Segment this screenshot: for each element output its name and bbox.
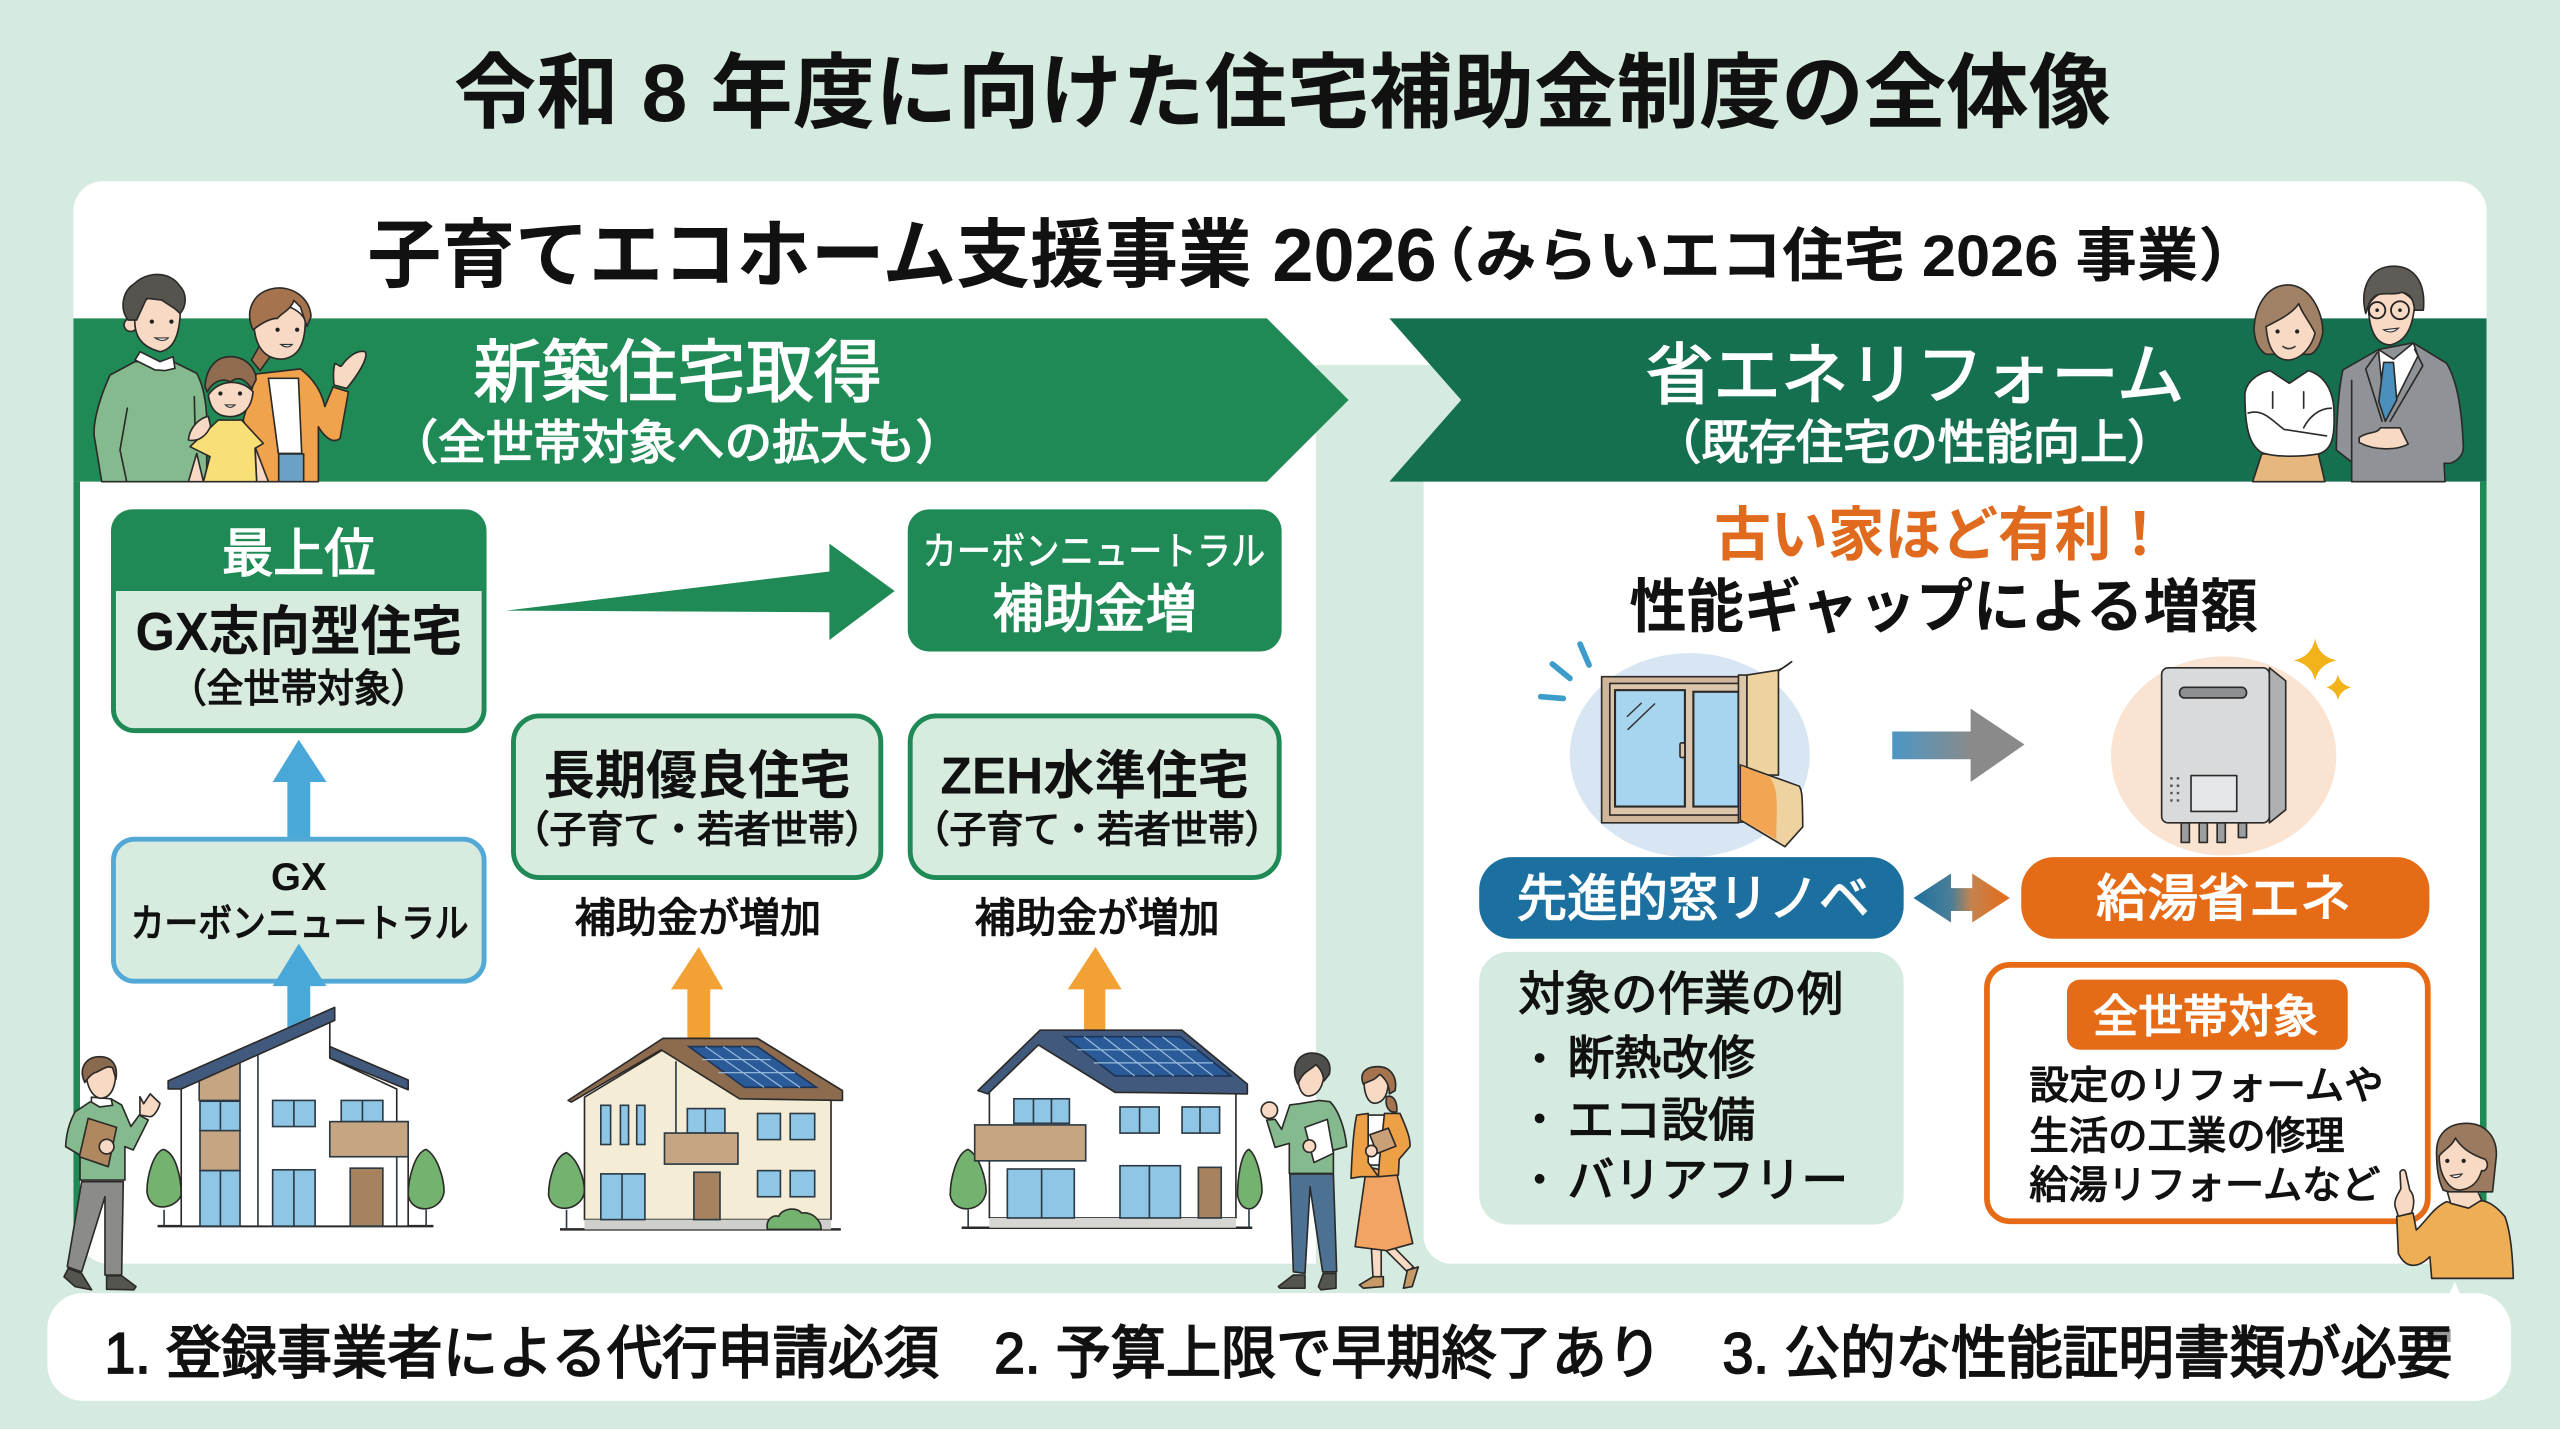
box: carbon neutral subsidy increase: 補助金増 bbox=[993, 581, 1197, 639]
header arrow: reform: 省エネリフォーム bbox=[1646, 338, 2184, 413]
box: GX carbon neutral: カーボンニュートラル bbox=[131, 903, 469, 946]
arrow: blue upper bbox=[273, 740, 327, 838]
panel: target work examples bbox=[1479, 952, 1904, 1224]
panel: reform column bbox=[1389, 266, 2487, 1264]
panel: target work examples: 断熱改修 bbox=[1567, 1032, 1755, 1085]
header arrow: reform: （既存住宅の性能向上） bbox=[1654, 417, 2175, 470]
header arrow: reform bbox=[1389, 318, 2487, 482]
arrow: orange left bbox=[671, 947, 723, 1040]
header arrow: new-build bbox=[73, 318, 1349, 482]
heading: programme name: 子育てエコホーム支援事業 2026 bbox=[367, 213, 1437, 297]
tag: all households: 全世帯対象 bbox=[2093, 991, 2318, 1042]
icon: family bbox=[94, 274, 366, 482]
arrow: tapered green bbox=[506, 544, 895, 640]
tag: all households bbox=[2067, 980, 2348, 1050]
box: top-tier GX home: （全世帯対象） bbox=[170, 668, 428, 711]
icon: couple bbox=[2245, 266, 2463, 482]
box: GX carbon neutral: GX bbox=[271, 856, 327, 899]
header arrow: new-build: 新築住宅取得 bbox=[473, 335, 882, 412]
pill: advanced window renovation bbox=[1479, 857, 1904, 939]
box: ZEH-level home: （子育て・若者世帯） bbox=[913, 808, 1282, 850]
icon: couple with documents bbox=[1261, 1053, 1418, 1290]
panel: main card top band bbox=[73, 181, 2487, 320]
icon: window with insulation bbox=[1541, 644, 1810, 857]
arrow: gradient grey bbox=[1892, 709, 2024, 782]
panel: band between header arrows bbox=[1257, 317, 1469, 365]
panel: all households: 設定のリフォームや bbox=[2029, 1065, 2384, 1108]
panel: all households: 給湯リフォームなど bbox=[2029, 1164, 2380, 1207]
arrow: two-way bbox=[1913, 873, 2010, 922]
panel: key requirements bar: 3. 公的な性能証明書類が必要 bbox=[1722, 1322, 2452, 1386]
text: subsidy increases (long-life): 補助金が増加 bbox=[575, 895, 821, 941]
heading: programme name: （みらいエコ住宅 2026 事業） bbox=[1414, 224, 2260, 289]
box: GX carbon neutral bbox=[113, 839, 484, 981]
header arrow: new-build: （全世帯対象への拡大も） bbox=[390, 417, 963, 470]
panel: new-build column bbox=[73, 274, 1349, 1264]
heading: performance gap: 性能ギャップによる増額 bbox=[1629, 575, 2258, 640]
box: ZEH-level home: ZEH水準住宅 bbox=[940, 747, 1249, 805]
box: top-tier GX home bbox=[111, 509, 487, 731]
arrow: orange right bbox=[1068, 947, 1122, 1032]
arrow: blue lower bbox=[273, 944, 327, 1032]
pill: advanced window renovation: 先進的窓リノベ bbox=[1517, 870, 1869, 927]
panel: target work examples: 対象の作業の例 bbox=[1518, 969, 1843, 1022]
box: carbon neutral subsidy increase bbox=[908, 509, 1282, 651]
box: top-tier GX home: GX志向型住宅 bbox=[136, 602, 462, 662]
box: ZEH-level home bbox=[910, 716, 1282, 878]
heading: programme name bbox=[367, 213, 2260, 297]
pill: hot water energy saving: 給湯省エネ bbox=[2096, 870, 2351, 927]
icon: GX house bbox=[147, 1007, 444, 1226]
box: long-life quality home bbox=[513, 716, 882, 878]
box: long-life quality home: （子育て・若者世帯） bbox=[513, 808, 882, 850]
title: 令和 8 年度に向けた住宅補助金制度の全体像 bbox=[454, 48, 2111, 139]
panel: target work examples: バリアフリー bbox=[1567, 1155, 1848, 1208]
icon: ZEH house bbox=[950, 1030, 1262, 1228]
text: subsidy increases (ZEH): 補助金が増加 bbox=[975, 895, 1220, 941]
panel: all households bbox=[1987, 965, 2428, 1221]
pill: hot water energy saving bbox=[2021, 857, 2429, 939]
icon: woman pointing bbox=[2395, 1123, 2513, 1278]
panel: key requirements bar: 1. 登録事業者による代行申請必須 bbox=[104, 1322, 939, 1386]
panel: target work examples: エコ設備 bbox=[1567, 1094, 1755, 1147]
panel: all households: 生活の工業の修理 bbox=[2029, 1115, 2344, 1158]
box: long-life quality home: 長期優良住宅 bbox=[544, 747, 851, 805]
icon: water heater bbox=[2111, 638, 2351, 856]
panel: key requirements bar: 2. 予算上限で早期終了あり bbox=[994, 1322, 1662, 1386]
heading: older homes advantage: 古い家ほど有利！ bbox=[1714, 503, 2168, 568]
box: top-tier GX home: 最上位 bbox=[222, 525, 376, 583]
icon: person with clipboard bbox=[64, 1057, 160, 1290]
panel: key requirements bar bbox=[47, 1282, 2511, 1401]
icon: long-life house bbox=[549, 1038, 842, 1229]
box: carbon neutral subsidy increase: カーボンニュートラル bbox=[922, 531, 1265, 574]
